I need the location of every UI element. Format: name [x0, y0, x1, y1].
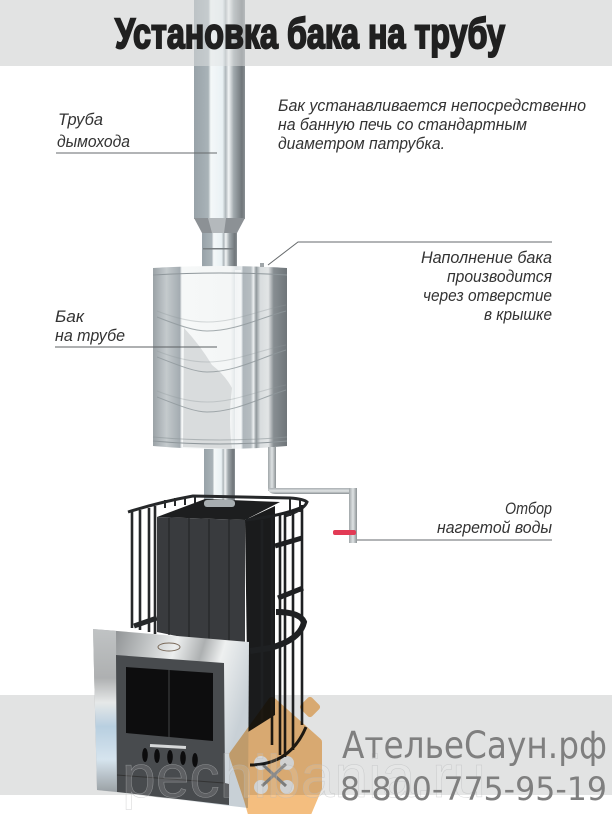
callout: filling hole: в крышке	[484, 305, 552, 324]
callout: tank	[55, 307, 217, 347]
callout: filling hole: производится	[447, 267, 552, 286]
callout: filling hole	[268, 242, 552, 324]
water tank	[153, 263, 287, 449]
phone number: 8-800-775-95-19	[340, 770, 607, 808]
footer band	[0, 695, 612, 795]
lower flue pipe	[204, 446, 235, 508]
callout: flue pipe: дымохода	[57, 132, 130, 151]
callout: filling hole: Наполнение бака	[421, 248, 552, 267]
callout: hot water outlet: нагретой воды	[437, 518, 552, 537]
callout: hot water outlet: Отбор	[505, 499, 552, 518]
stove right grid bars	[246, 505, 306, 765]
description text	[278, 96, 586, 153]
callout: hot water outlet	[357, 499, 552, 540]
callout: filling hole: через отверстие	[423, 286, 552, 305]
callout: flue pipe	[56, 110, 217, 153]
stove back grid bars	[128, 496, 307, 634]
logo: orange house	[233, 696, 321, 814]
watermark: pechibania.ru	[122, 743, 486, 810]
callout: flue pipe: Труба	[58, 110, 103, 129]
description text: Бак устанавливается непосредственно	[278, 96, 586, 115]
callout: tank: на трубе	[55, 326, 125, 345]
chimney pipe assembly	[194, 0, 245, 267]
stove front panel	[93, 629, 249, 808]
door vents	[142, 748, 198, 767]
callout: tank: Бак	[55, 307, 85, 326]
stove door	[116, 655, 229, 805]
door glass	[126, 667, 213, 741]
header band	[0, 0, 612, 66]
hot water tap pipe	[268, 447, 357, 543]
stove body	[157, 499, 280, 732]
description text: диаметром патрубка.	[278, 134, 445, 153]
description text: на банную печь со стандартным	[278, 115, 527, 134]
